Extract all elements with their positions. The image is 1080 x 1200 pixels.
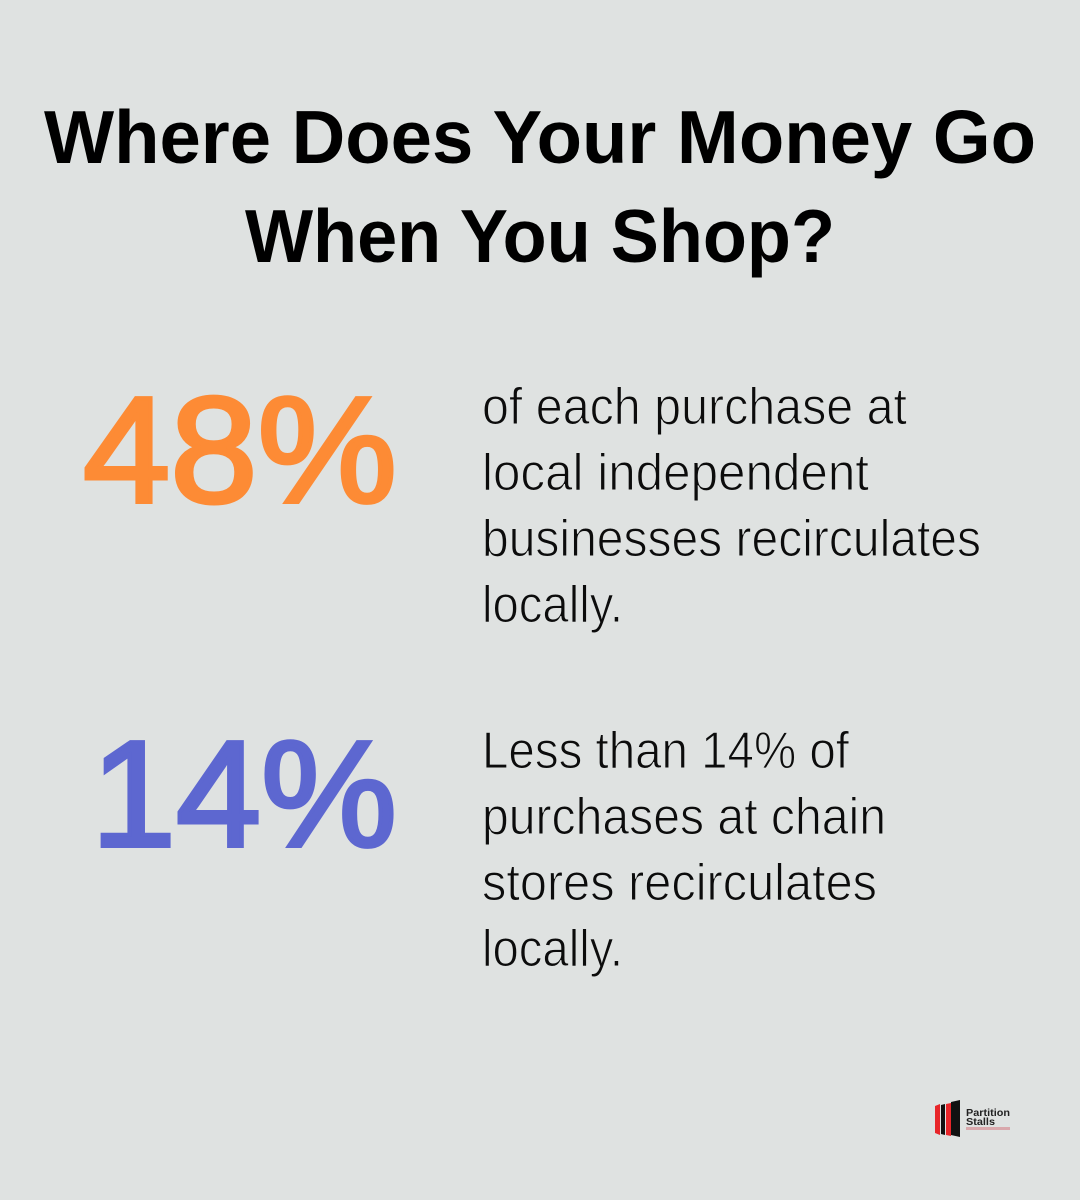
- logo: Partition Stalls: Stalls: [966, 1116, 995, 1128]
- text block: local businesses: businesses recirculates: [482, 510, 981, 568]
- logo: Partition Stalls: Partition: [966, 1107, 1010, 1119]
- text block: local businesses: of each purchase at: [482, 378, 908, 436]
- title: When You Shop?: [245, 194, 835, 278]
- text block: local businesses: local independent: [482, 444, 870, 502]
- title: [44, 95, 1036, 278]
- stat: 14%: 14%: [91, 709, 397, 878]
- text block: chain stores: stores recirculates: [482, 854, 877, 912]
- text block: local businesses: [482, 378, 981, 634]
- title: Where Does Your Money Go: [44, 95, 1036, 179]
- text block: chain stores: [482, 722, 886, 978]
- text block: chain stores: locally.: [482, 920, 623, 978]
- text block: chain stores: purchases at chain: [482, 788, 886, 846]
- text block: local businesses: locally.: [482, 576, 623, 634]
- stat: 48%: 48%: [83, 365, 397, 534]
- logo: Partition Stalls: [935, 1100, 1010, 1137]
- text block: chain stores: Less than 14% of: [482, 722, 849, 780]
